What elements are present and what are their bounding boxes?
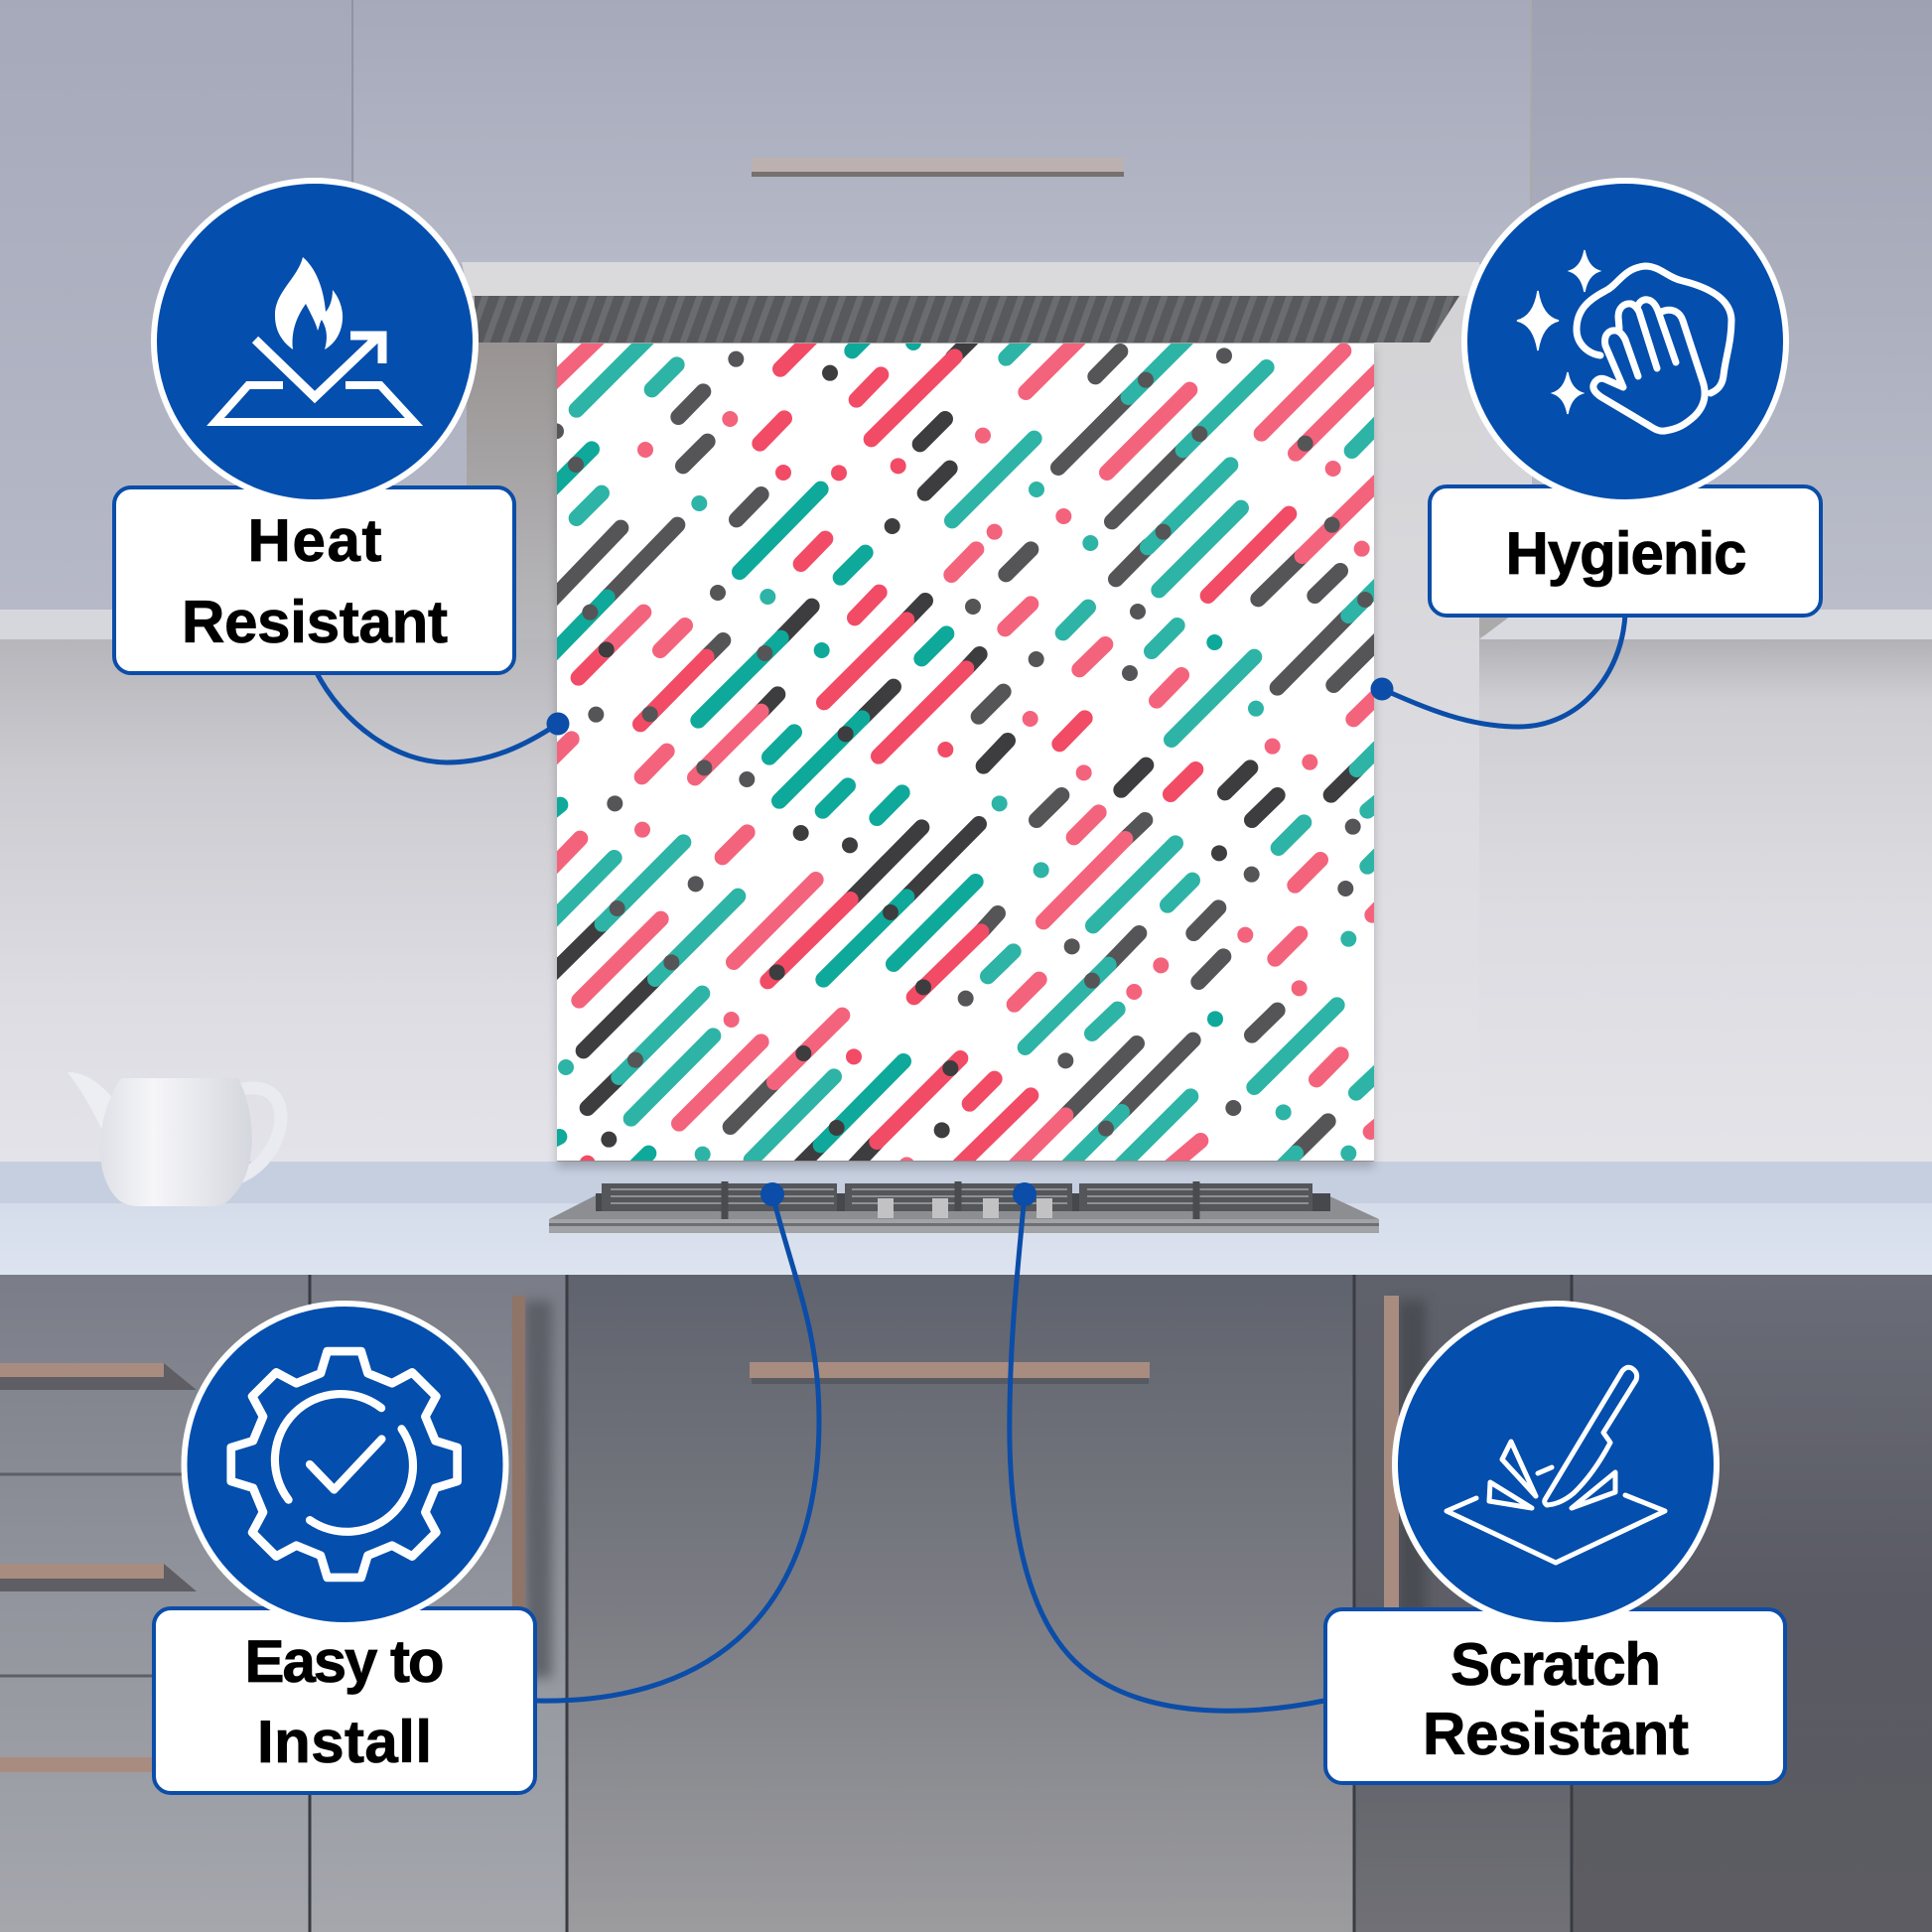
label box: [114, 487, 514, 673]
connector: Hygienic: [1370, 614, 1625, 727]
icon disc: [1464, 181, 1786, 502]
lower cabinet left: [0, 1275, 310, 1932]
wall right of panel under hood upper: [1479, 264, 1533, 612]
upper cabinet left: [0, 0, 467, 610]
extractor hood lip: [462, 262, 1479, 296]
connector: Scratch Resistant: [1010, 1182, 1324, 1711]
drawer handle 2: [0, 1564, 164, 1579]
icon disc: [154, 181, 476, 502]
pattern: top-right quadrant: [965, 335, 1383, 766]
counter top: [0, 1203, 1932, 1275]
icon disc: [1395, 1304, 1717, 1625]
icon: flame over surface with reflected arrow: [215, 257, 414, 422]
connector: Easy to Install: [537, 1182, 819, 1701]
label box: [154, 1608, 535, 1793]
centre handle shadow: [752, 1376, 1149, 1384]
callout: Hygienic: [1430, 181, 1821, 616]
icon disc: [185, 1304, 506, 1625]
splashback panel with diagonal pattern: [543, 335, 1387, 1173]
left cabinet bottom strip: [0, 610, 467, 639]
callout: Easy to Install: [154, 1304, 535, 1793]
drawer gaps: [0, 1474, 310, 1676]
cabinet gaps: [310, 1275, 1572, 1932]
top handle underside: [752, 172, 1124, 177]
wall left of panel: [0, 635, 557, 1181]
right cabinet bottom strip: [1479, 610, 1932, 639]
heading: Scratch: [1450, 1631, 1661, 1698]
label box: [1325, 1609, 1785, 1783]
label box: [1430, 486, 1821, 616]
heading line 2: Resistant: [182, 589, 448, 655]
cooktop: [549, 1181, 1379, 1233]
heading: Heat: [248, 507, 382, 574]
vertical handle left: [512, 1296, 525, 1678]
extractor grill: [475, 296, 1459, 343]
top handle: [752, 158, 1124, 177]
drawer handle 1 shadow: [0, 1363, 197, 1390]
lower cabinet right door: [1355, 1275, 1571, 1932]
lower cabinet left door: [310, 1275, 566, 1932]
centre handle: [750, 1362, 1150, 1378]
splashback panel shadow: [557, 347, 1374, 1168]
connector: Heat Resistant: [315, 669, 570, 762]
lower cabinet far right: [1573, 1275, 1932, 1932]
heading: Hygienic: [1505, 520, 1747, 587]
drawer handle 3: [0, 1757, 159, 1772]
drawer handle 1: [0, 1363, 164, 1377]
pattern: bottom-left quadrant: [543, 752, 998, 1173]
callout: Heat Resistant: [114, 181, 514, 673]
icon: wiping hand with sparkles: [1517, 250, 1731, 431]
vertical handle left shadow: [524, 1301, 552, 1678]
heading: Easy to: [244, 1628, 445, 1695]
upper cabinet right: [1532, 0, 1932, 610]
pattern: bottom-right quadrant: [953, 743, 1387, 1172]
wall right of panel under hood: [1374, 264, 1479, 1181]
vertical handle right: [1384, 1296, 1399, 1623]
drawer handle 2 shadow: [0, 1564, 197, 1591]
vertical handle right shadow: [1398, 1301, 1426, 1623]
lower cabinet centre: [568, 1275, 1355, 1932]
counter back: [0, 1162, 1932, 1203]
icon: knife scratching surface: [1447, 1367, 1665, 1563]
wall right of panel: [1374, 635, 1932, 1181]
teapot: [68, 1072, 281, 1206]
icon: gear with check mark: [231, 1351, 458, 1578]
heading line 2: Install: [257, 1709, 432, 1775]
alcove beside panel: [467, 338, 558, 639]
pattern: top-left quadrant: [548, 335, 1035, 801]
cabinet gap left: [351, 0, 353, 262]
heading line 2: Resistant: [1423, 1701, 1689, 1767]
upper cabinet centre: [354, 0, 1530, 264]
callout: Scratch Resistant: [1325, 1304, 1785, 1783]
